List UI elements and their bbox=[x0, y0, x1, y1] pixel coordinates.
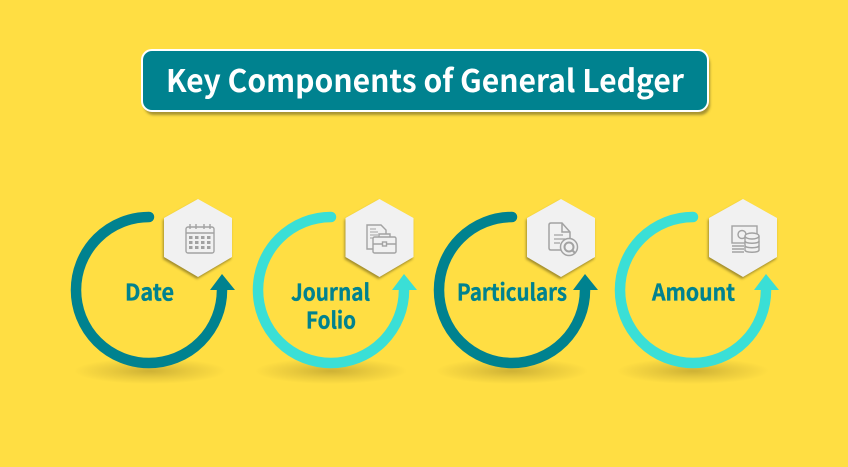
circular arrow bbox=[439, 217, 598, 363]
ground shadow bbox=[74, 358, 226, 384]
panel: Amount bbox=[617, 199, 779, 384]
ground shadow bbox=[436, 358, 588, 384]
hexagon with document search icon bbox=[526, 199, 595, 279]
label: Journal bbox=[291, 274, 370, 308]
ground shadow bbox=[255, 358, 407, 384]
label: Amount bbox=[651, 274, 735, 308]
hexagon with calendar icon bbox=[163, 199, 232, 279]
panel: Date bbox=[74, 199, 235, 384]
panel: Particulars bbox=[436, 199, 598, 384]
panel: Journal Folio bbox=[255, 199, 417, 384]
hexagon with money and coins icon bbox=[708, 199, 777, 279]
hexagon with document and briefcase icon bbox=[344, 199, 414, 279]
circular arrow bbox=[76, 217, 235, 363]
label: Particulars bbox=[457, 274, 567, 308]
ground shadow bbox=[617, 358, 769, 384]
label line 2: Folio bbox=[306, 302, 356, 336]
circular arrow bbox=[620, 217, 779, 363]
title: Key Components of General Ledger bbox=[166, 56, 684, 101]
circular arrow bbox=[258, 217, 417, 363]
title bbox=[142, 50, 710, 115]
label: Date bbox=[125, 274, 174, 308]
